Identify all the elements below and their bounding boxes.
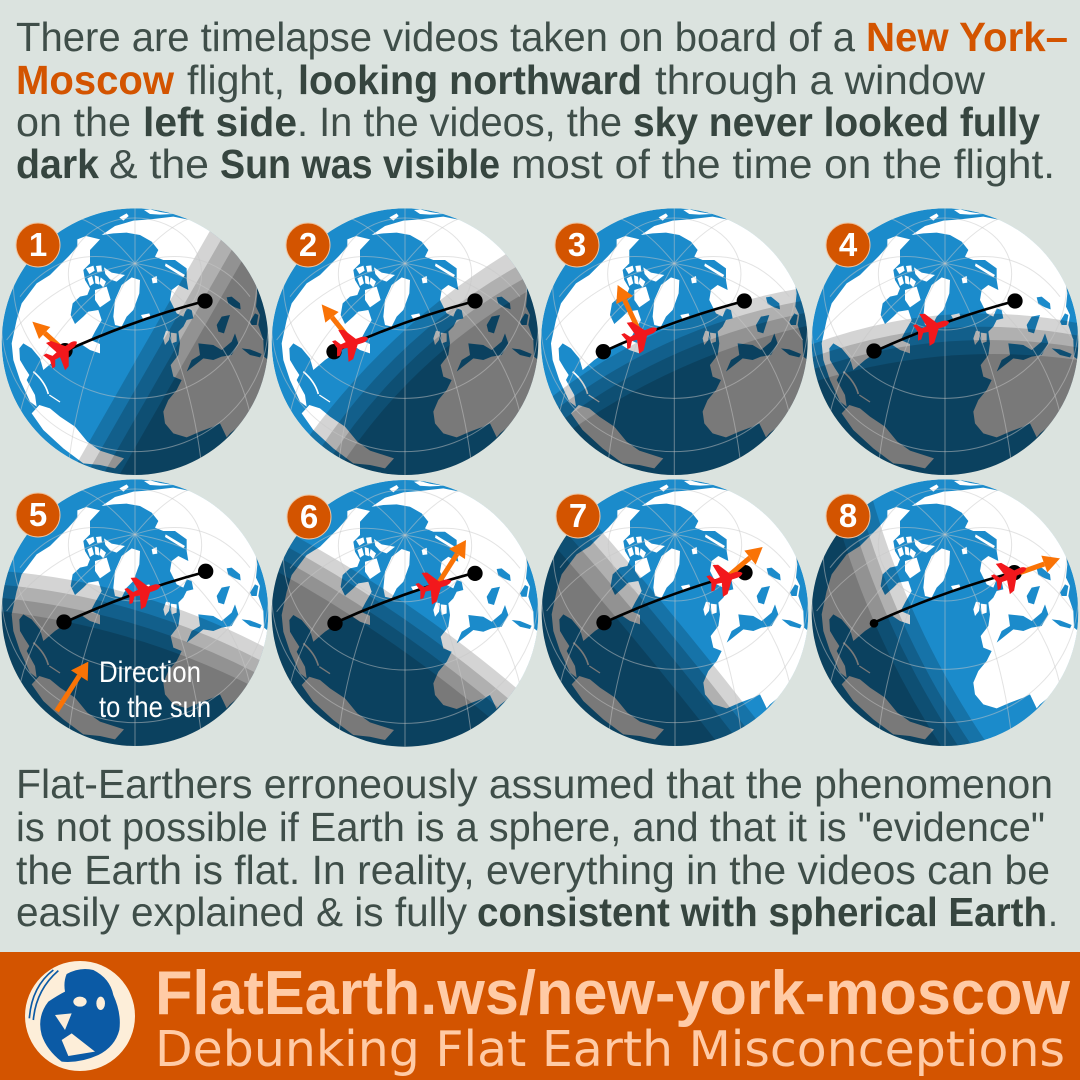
heading text: flight description	[16, 14, 1068, 187]
footer subtitle: Debunking Flat Earth Misconceptions	[155, 1021, 1065, 1078]
heading text: flight description: left side	[143, 99, 297, 145]
arrow: direction to the sun	[57, 662, 88, 711]
heading text: flight description: looking northward	[298, 57, 642, 103]
heading text: flight description: sky never looked fully	[633, 99, 1040, 145]
badge 4	[826, 223, 870, 267]
badge 1: 1	[29, 226, 47, 263]
heading text: flight description: dark	[16, 141, 99, 187]
badge 6	[287, 495, 331, 539]
footer banner	[0, 952, 1080, 1080]
badge 6: 6	[300, 498, 318, 535]
badge 7: 7	[569, 497, 587, 534]
globe 7	[542, 479, 808, 746]
globe 4	[812, 208, 1078, 475]
badge 7	[556, 494, 600, 538]
body text: flat-earther claim: easily explained & is fully	[16, 889, 467, 935]
heading text: flight description: most of the time on the flight.	[511, 141, 1055, 187]
heading text: flight description: New York–	[866, 14, 1068, 60]
badge 8: 8	[839, 497, 857, 534]
heading text: flight description: flight,	[187, 57, 285, 103]
body text: flat-earther claim: consistent with spherical Earth	[477, 889, 1047, 935]
globe 3	[541, 208, 808, 475]
badge 3: 3	[568, 226, 586, 263]
badge 5	[16, 493, 60, 537]
body text: flat-earther claim: Flat-Earthers erroneously assumed that the phenomenon	[16, 761, 1053, 807]
body text: flat-earther claim: the Earth is flat. In reality, everything in the videos can be	[16, 847, 1050, 893]
label: direction to the sun: to the sun	[99, 691, 211, 724]
globe 1	[2, 208, 268, 475]
badge 5: 5	[29, 496, 47, 533]
badge 2: 2	[299, 226, 317, 263]
heading text: flight description: Moscow	[16, 57, 174, 103]
globe 6	[272, 480, 538, 747]
heading text: flight description: on the	[16, 99, 131, 145]
globe 8	[812, 479, 1078, 746]
badge 1	[16, 223, 60, 267]
body text: flat-earther claim: is not possible if Earth is a sphere, and that it is "evidence"	[16, 804, 1045, 850]
heading text: flight description: & the	[109, 141, 209, 187]
body text: flat-earther claim: .	[1048, 889, 1058, 935]
globe 5	[2, 479, 268, 746]
badge 3	[555, 223, 599, 267]
logo: flat earth map	[25, 961, 135, 1071]
badge 4: 4	[839, 226, 858, 263]
badge 8	[826, 494, 870, 538]
label: direction to the sun: Direction	[99, 656, 201, 689]
heading text: flight description: Sun was visible	[220, 141, 500, 187]
heading text: flight description: There are timelapse videos taken on board of a	[16, 14, 855, 60]
heading text: flight description: through a window	[655, 57, 985, 103]
footer title: FlatEarth.ws/new-york-moscow	[155, 959, 1071, 1028]
heading text: flight description: . In the videos, the	[297, 99, 622, 145]
globe 2	[272, 208, 538, 475]
label: direction to the sun	[99, 656, 211, 724]
body text: flat-earther claim	[16, 761, 1058, 935]
badge 2	[286, 223, 330, 267]
